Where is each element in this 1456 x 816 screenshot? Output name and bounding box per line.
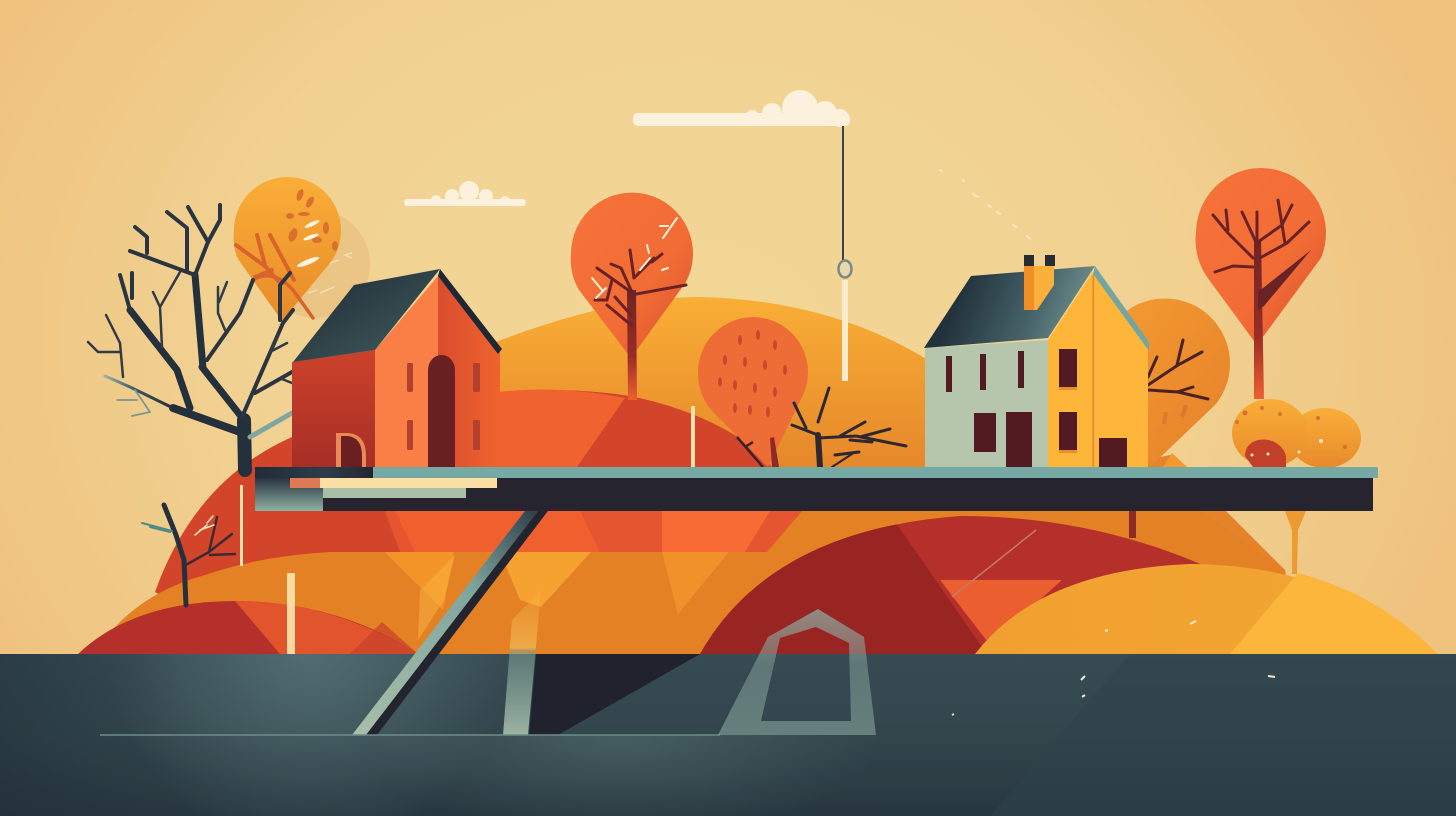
dark reflection triangle	[529, 654, 700, 735]
hill: dark red right	[700, 516, 1201, 654]
barn left wall	[292, 350, 375, 468]
barn roof edge	[438, 269, 502, 354]
smoke dots	[940, 170, 1030, 239]
cloud: small	[404, 181, 526, 206]
house yellow gable	[1048, 272, 1148, 468]
hill: large back dome	[488, 297, 930, 475]
barn orange front	[375, 276, 438, 468]
barn roof	[293, 269, 440, 362]
house windows and doors	[946, 349, 1127, 468]
salmon stripe	[290, 478, 320, 488]
hill: red bottom left	[78, 601, 418, 654]
waterline	[100, 734, 720, 736]
bare tree: upper left	[88, 205, 293, 470]
cloud: large	[633, 90, 850, 127]
water	[0, 654, 1456, 816]
hill: orange mid layer	[115, 511, 1300, 654]
pale vertical strut	[503, 590, 541, 735]
glass arch shape	[718, 609, 876, 735]
house left wall	[925, 340, 1048, 468]
platform dark top left	[255, 467, 373, 478]
cream poles	[240, 406, 695, 654]
house roof	[924, 266, 1095, 348]
house roof edge	[1093, 266, 1149, 351]
platform body	[255, 478, 1373, 511]
barn windows	[407, 363, 480, 450]
shadow circle behind left pin tree	[262, 210, 370, 318]
barn shaded front	[438, 276, 500, 468]
green and yellow house	[924, 255, 1149, 468]
trunks below platform	[1129, 511, 1306, 574]
faint branches in the shadow circle	[308, 253, 352, 293]
pin tree: centre	[571, 193, 693, 400]
red barn house	[292, 269, 502, 468]
small bare tree lower left	[142, 505, 235, 605]
hill: red middle	[155, 390, 810, 600]
platform teal top	[373, 467, 1378, 478]
hill: orange facets	[385, 552, 729, 640]
pin tree: round with dots	[698, 317, 808, 467]
pin tree: behind right house	[1100, 298, 1230, 467]
pin tree: far right	[1195, 168, 1326, 399]
shrubs at right	[1232, 399, 1361, 468]
platform left block	[255, 478, 323, 511]
barn small side door	[336, 433, 366, 468]
hill: red middle highlights	[385, 390, 802, 552]
pin tree: top left	[234, 177, 341, 321]
hanging lamp line and ring	[838, 126, 852, 381]
hill: yellow right	[975, 564, 1438, 654]
chimney	[1024, 255, 1055, 310]
sage stripe	[323, 488, 466, 498]
platform	[255, 467, 1378, 511]
diagonal strut	[352, 511, 548, 735]
barn arched door	[428, 355, 455, 468]
hill: back right orange	[600, 455, 1295, 654]
bare tree: centre foreground	[792, 388, 906, 467]
cream stripe	[320, 478, 497, 488]
house gable centre line	[1092, 275, 1094, 468]
